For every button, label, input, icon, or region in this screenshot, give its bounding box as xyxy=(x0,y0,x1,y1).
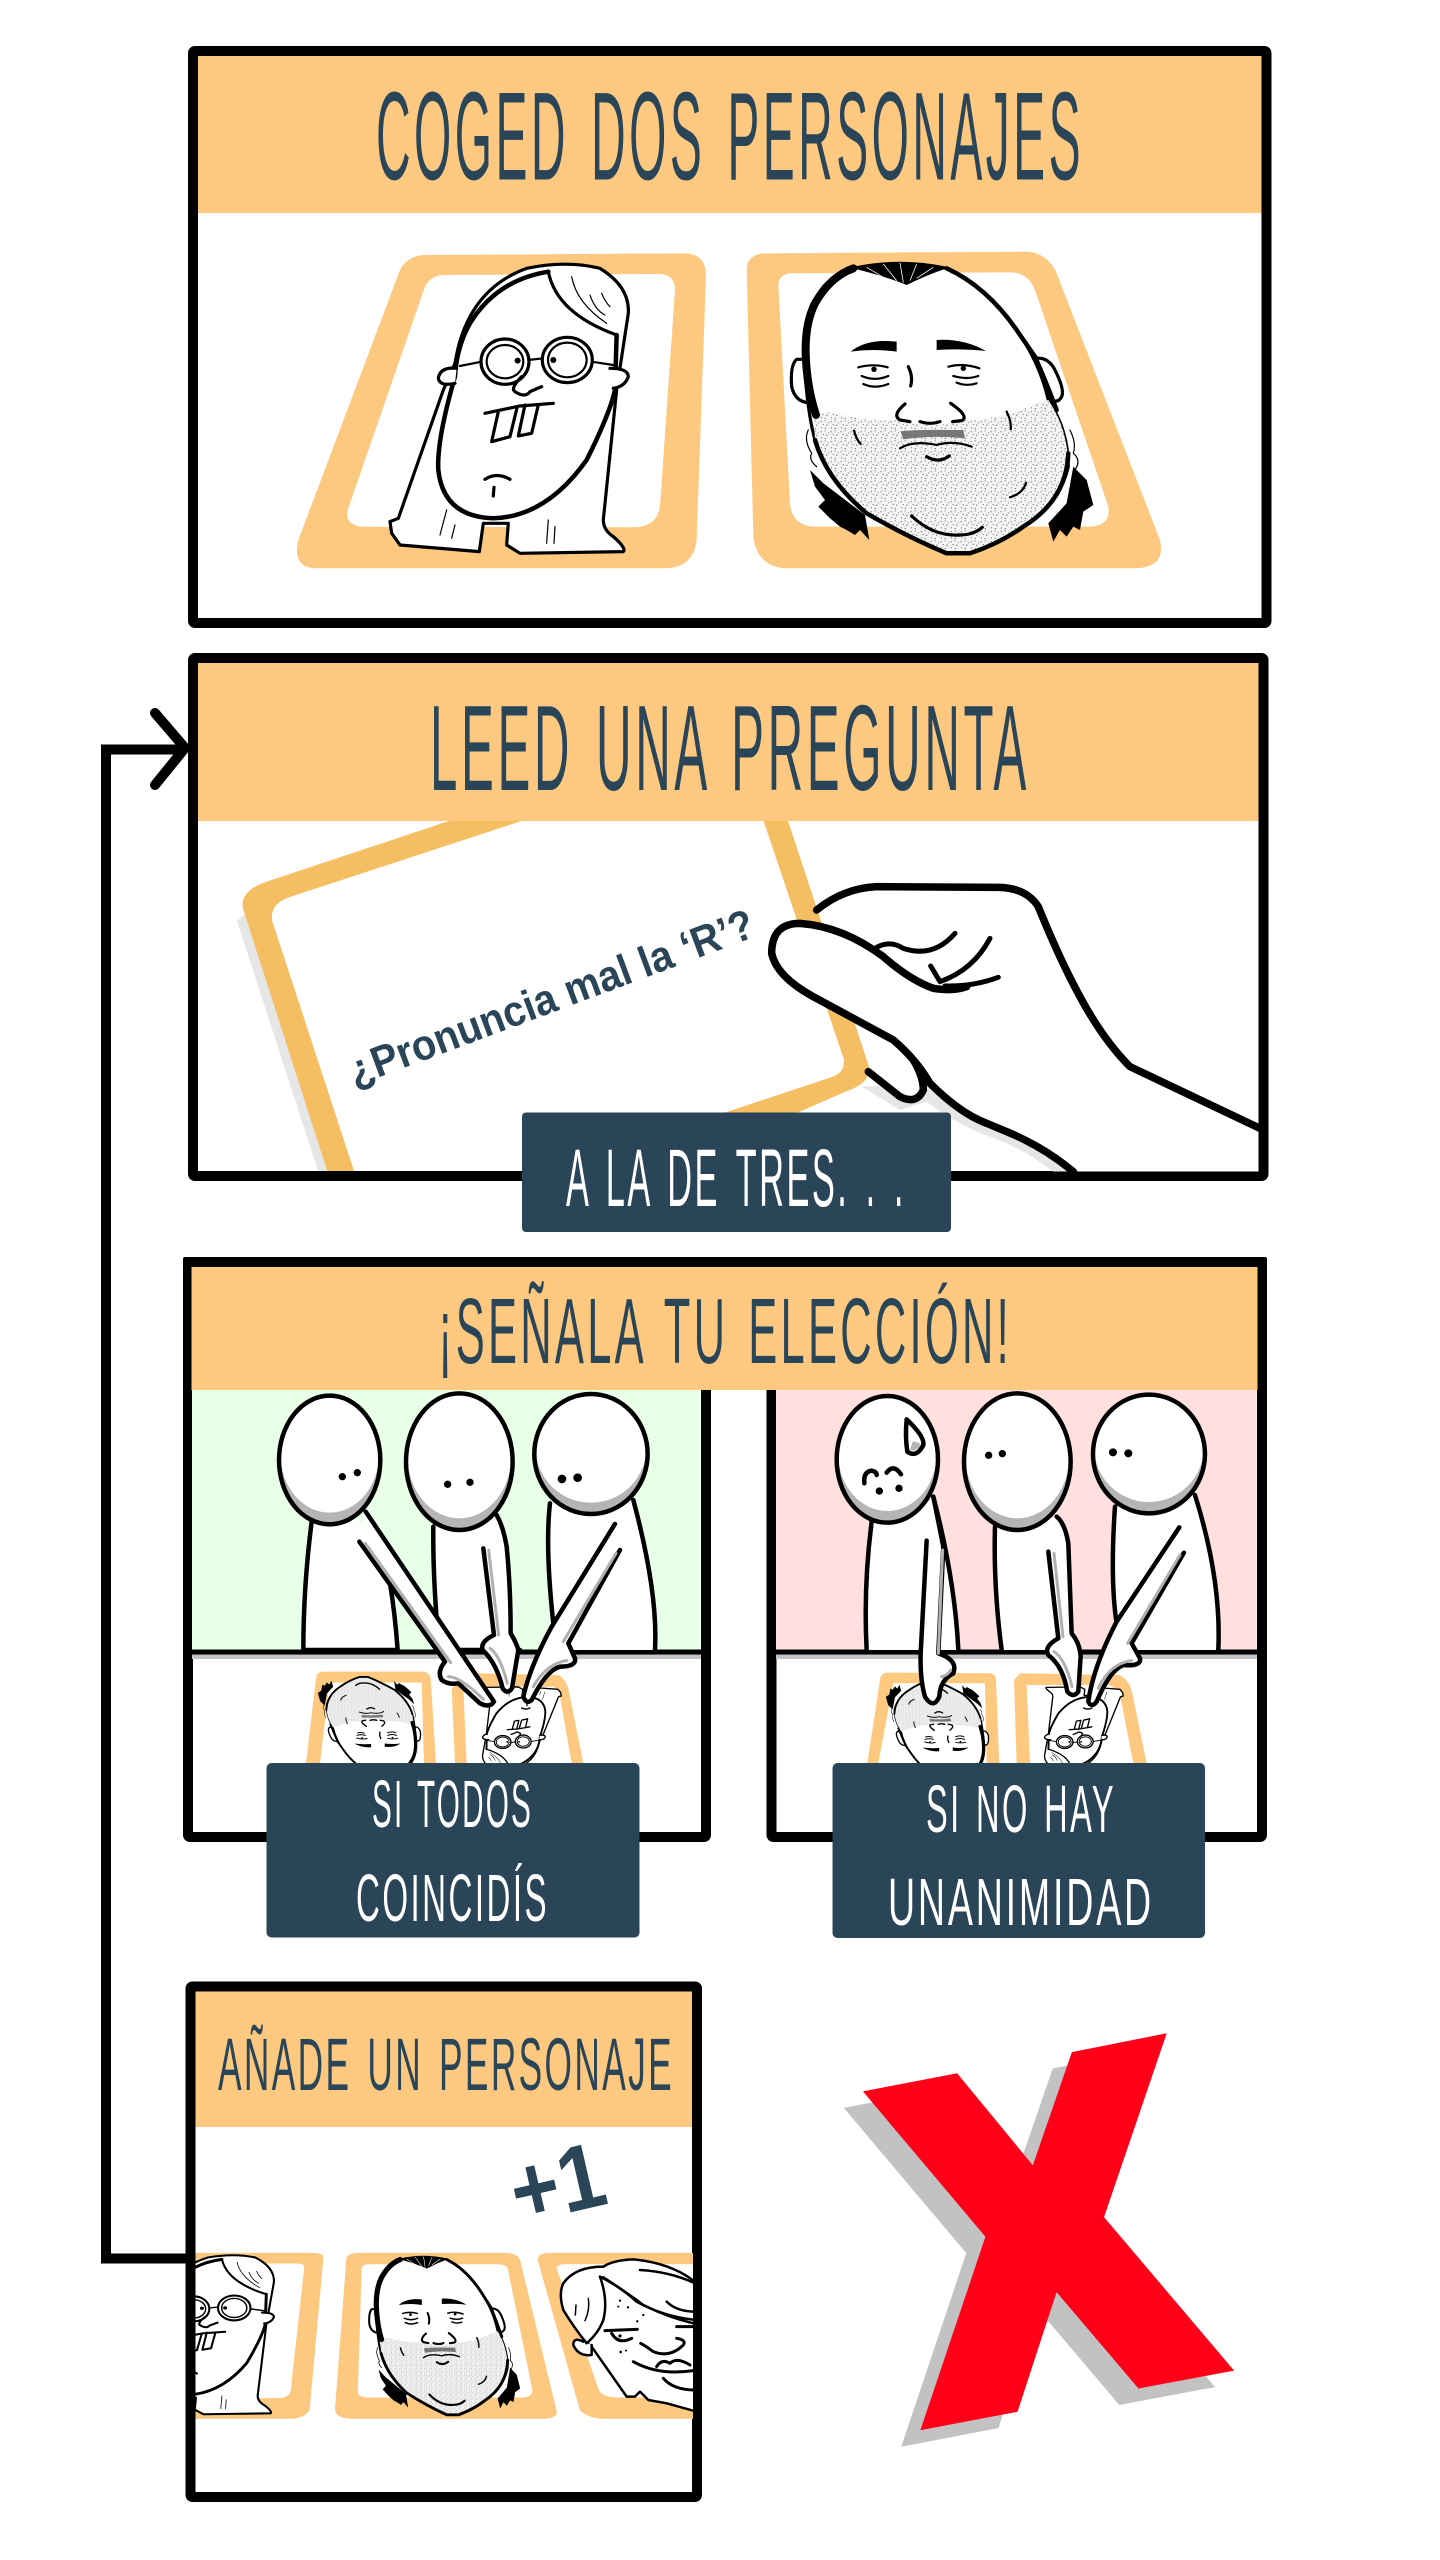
character card: glasses xyxy=(297,253,706,568)
callout: si no hay unanimidad: SI NO HAY xyxy=(926,1772,1116,1847)
hand holding card xyxy=(772,885,1260,1172)
three people pointing at different cards xyxy=(837,1393,1219,1705)
panel: añade un personaje: AÑADE UN PERSONAJE xyxy=(218,2023,674,2106)
icon: red X xyxy=(844,2033,1234,2447)
header band: step 4a xyxy=(196,1992,692,2127)
header band: step 1 xyxy=(198,56,1262,213)
sub-panel: no unanimity xyxy=(772,1262,1262,1837)
cards on table, left xyxy=(306,1672,583,1763)
cards on table, right xyxy=(867,1673,1147,1763)
arrow: loop back to question xyxy=(106,713,186,2258)
character card: bearded man xyxy=(747,252,1161,568)
third character: freckled woman xyxy=(561,2259,697,2412)
three people pointing at the same card xyxy=(279,1393,655,1705)
callout: si todos coincidís: COINCIDÍS xyxy=(356,1861,549,1936)
row of three character cards xyxy=(196,2252,693,2419)
sub-panel: all agree xyxy=(188,1262,706,1837)
callout: si todos coincidís: SI TODOS xyxy=(372,1767,533,1842)
header band: step 2 xyxy=(198,663,1258,821)
callout: si todos coincidís xyxy=(266,1763,640,1938)
panel: señala tu elección xyxy=(183,1257,1267,1837)
callout: si no hay unanimidad xyxy=(832,1763,1205,1940)
panel: añade un personaje xyxy=(119,1986,702,2497)
callout: a la de tres xyxy=(522,1112,951,1232)
panel: coged dos personajes xyxy=(193,51,1266,623)
header band: step 3 xyxy=(183,1257,1267,1390)
card question text: ¿Pronuncia mal la ‘R’? xyxy=(341,900,761,1096)
plus one label: +1 xyxy=(500,2123,615,2244)
panel: leed una pregunta xyxy=(193,658,1264,1176)
text: A LA DE TRES. . . xyxy=(566,1133,906,1224)
question card xyxy=(237,821,1260,1172)
callout: si no hay unanimidad: UNANIMIDAD xyxy=(888,1865,1154,1940)
